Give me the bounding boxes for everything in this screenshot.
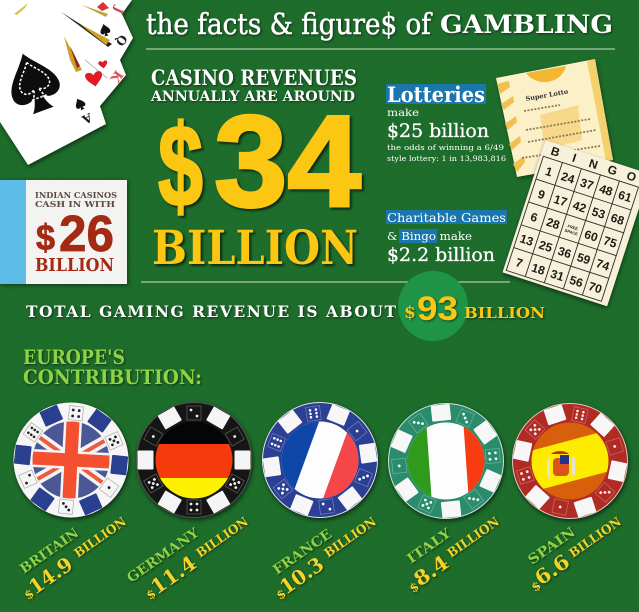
icon: coat of arms	[547, 451, 575, 477]
label: germany	[124, 514, 251, 602]
heading: europe's contribution	[23, 345, 202, 389]
panel: indian casinos: BILLION	[35, 255, 114, 276]
illustration: bingo card: O	[625, 168, 638, 185]
chip: britain	[14, 402, 128, 518]
illustration: bingo card: 48	[597, 182, 615, 199]
panel: lotteries: the odds of winning a 6/49	[387, 143, 504, 152]
illustration: bingo card: 13	[518, 231, 535, 249]
label: france: $	[274, 586, 289, 602]
flag: spain	[532, 422, 608, 500]
illustration: bingo card: 17	[552, 192, 569, 210]
illustration: bingo card: 28	[545, 215, 562, 232]
illustration: bingo card: 59	[575, 250, 592, 268]
label: germany: 11.4	[146, 551, 201, 599]
panel: charitable games and bingo: $2.2 billion	[387, 244, 495, 266]
icon: queen corner: Q	[113, 32, 130, 49]
panel: lotteries	[386, 82, 506, 163]
label: france	[270, 514, 379, 602]
total gaming revenue: BILLION	[464, 304, 545, 322]
chip: spain	[512, 404, 628, 518]
label: italy	[404, 514, 502, 595]
total gaming revenue: 93	[417, 290, 458, 328]
flag: germany	[154, 420, 234, 500]
title	[146, 7, 613, 41]
panel: lotteries: style lottery: 1 in 13,983,816	[387, 154, 506, 163]
title: the facts & figure$ of	[146, 7, 433, 41]
icon: king corner	[64, 36, 125, 88]
label: germany: GERMANY	[124, 525, 202, 586]
label: spain: SPAIN	[525, 524, 579, 568]
panel: lotteries: make	[387, 108, 419, 119]
casino revenues heading	[150, 65, 357, 105]
illustration: bingo card: 75	[602, 233, 619, 251]
illustration: bingo card: 24	[559, 169, 577, 187]
label: france: FRANCE	[270, 526, 335, 578]
illustration: bingo card: SPACE	[564, 228, 579, 237]
total gaming revenue: TOTAL GAMING REVENUE IS ABOUT	[26, 302, 396, 321]
heading: europe's contribution: CONTRIBUTION:	[23, 365, 202, 389]
flag: united kingdom	[32, 422, 110, 498]
heading: europe's contribution: EUROPE'S	[23, 345, 125, 369]
illustration: bingo card: 53	[590, 204, 607, 222]
icon: large ace spade	[0, 45, 67, 119]
label: germany: $	[144, 586, 159, 602]
illustration: bingo card: 68	[609, 211, 626, 228]
panel: indian casinos: CASH IN WITH	[35, 200, 115, 210]
label: britain	[17, 514, 129, 602]
illustration: bingo card: B	[549, 144, 562, 160]
big number: $34 billion	[152, 88, 361, 276]
panel: indian casinos	[0, 180, 127, 284]
label: britain: $	[22, 586, 37, 602]
panel: lotteries: $25 billion	[387, 120, 489, 142]
playing cards	[0, 0, 133, 165]
illustration: bingo card: 74	[594, 256, 612, 274]
panel: indian casinos: 26	[59, 205, 114, 262]
big number: $34 billion: $	[158, 101, 203, 231]
illustration: bingo card: 36	[556, 244, 573, 261]
label: spain: BILLION	[566, 514, 624, 560]
illustration: bingo card: 42	[571, 198, 588, 216]
illustration: bingo card: 60	[583, 227, 600, 245]
label: spain	[525, 514, 624, 594]
chip: france	[260, 402, 382, 522]
chip: germany	[136, 402, 252, 518]
label: britain: 14.9	[24, 552, 77, 599]
illustration: bingo card: 56	[568, 273, 585, 290]
illustration: bingo card: 1	[544, 164, 554, 180]
icon: ace corner	[73, 96, 95, 127]
total gaming revenue: $	[404, 303, 416, 323]
label: britain: BRITAIN	[17, 525, 82, 577]
illustration: bingo card: 25	[537, 238, 554, 255]
icon: ace corner: A	[79, 110, 95, 127]
casino revenues heading: CASINO REVENUES	[151, 65, 357, 90]
illustration: bingo card: 31	[549, 267, 566, 284]
illustration: bingo card	[503, 140, 639, 306]
label: britain: BILLION	[71, 514, 129, 560]
illustration: bingo card: 61	[616, 188, 634, 205]
illustration: bingo card: G	[606, 162, 619, 178]
total gaming revenue	[26, 271, 545, 341]
illustration: bingo card: FREE	[567, 223, 579, 231]
big number: $34 billion: BILLION	[152, 221, 358, 276]
label: france: 10.3	[275, 552, 328, 599]
panel: lotteries: Lotteries	[387, 82, 485, 107]
label: france: BILLION	[321, 514, 379, 560]
illustration: bingo card: 6	[529, 210, 540, 225]
panel: charitable games and bingo: Charitable Games	[387, 211, 506, 225]
label: italy: $	[407, 579, 422, 595]
label: italy: 8.4	[409, 550, 453, 591]
label: spain: $	[529, 578, 544, 594]
label: italy: ITALY	[404, 525, 455, 567]
icon: king corner: K	[106, 67, 125, 85]
title: GAMBLING	[440, 10, 613, 39]
chip: italy	[388, 404, 504, 518]
illustration: bingo card: 37	[578, 175, 596, 193]
flag: france	[282, 422, 358, 498]
illustration: bingo card: 9	[536, 187, 547, 202]
illustration: bingo card: 18	[530, 260, 547, 278]
illustration: bingo card: N	[587, 156, 600, 172]
casino revenues heading: ANNUALLY ARE AROUND	[150, 89, 355, 105]
label: germany: BILLION	[193, 514, 251, 560]
big number: $34 billion: 34	[214, 88, 361, 234]
panel: indian casinos: $	[36, 217, 55, 258]
icon: jack corner	[82, 2, 126, 17]
illustration: lottery ticket: Super Lotto	[525, 88, 569, 103]
illustration: bingo card: I	[571, 151, 578, 165]
panel: charitable games and bingo: & Bingo make	[387, 229, 472, 243]
label: spain: 6.6	[530, 549, 574, 590]
label: italy: BILLION	[444, 514, 502, 560]
illustration: bingo card: 70	[587, 279, 604, 297]
icon: queen corner	[61, 12, 130, 49]
flag: italy	[408, 422, 484, 500]
illustration: lottery ticket	[496, 59, 613, 177]
illustration: bingo card: 7	[514, 255, 525, 271]
green highlight circle	[398, 271, 468, 341]
panel: indian casinos: INDIAN CASINOS	[35, 191, 117, 201]
panel: charitable games and bingo	[386, 210, 507, 266]
icon: jack corner: J	[111, 4, 126, 16]
